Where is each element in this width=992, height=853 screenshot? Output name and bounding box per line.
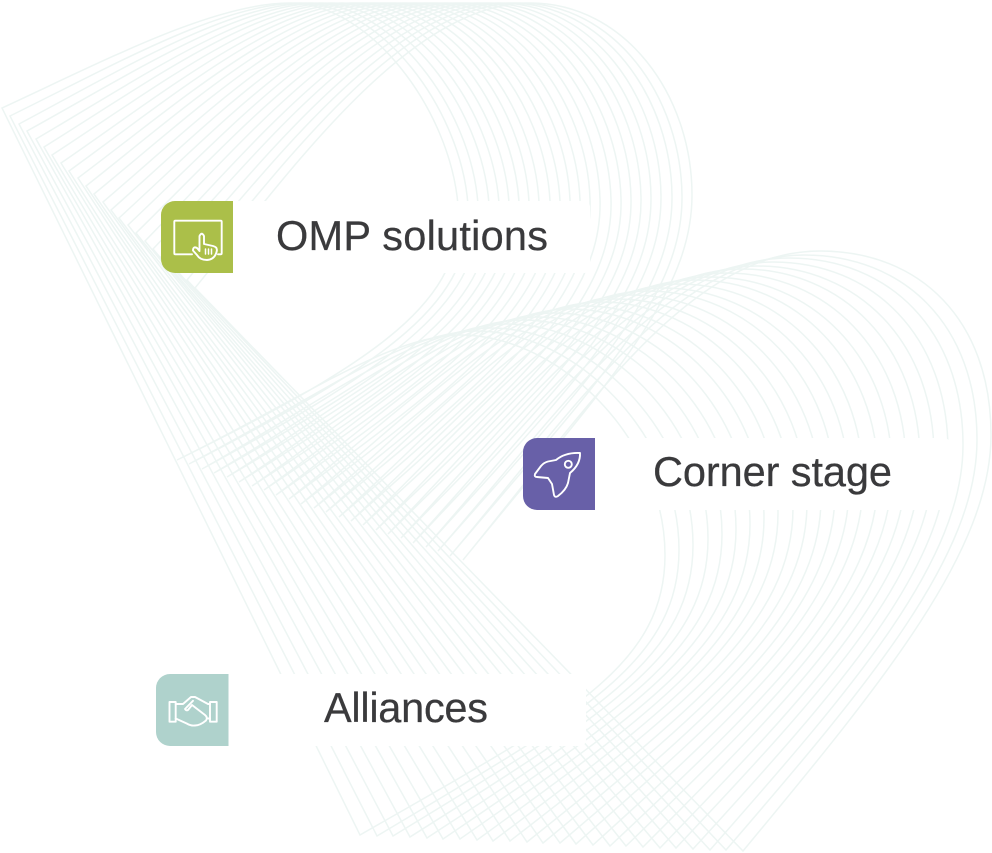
label background: Alliances	[228, 674, 586, 746]
panel: Corner stage	[523, 438, 950, 510]
panel: OMP solutions	[161, 201, 590, 273]
icon: handshake	[170, 697, 217, 726]
panel: Alliances	[156, 674, 586, 746]
label background: OMP solutions	[233, 201, 590, 273]
label background: Corner stage	[595, 438, 950, 510]
label: Corner stage: Corner stage	[653, 448, 892, 495]
label: Alliances: Alliances	[324, 684, 488, 731]
icon tile: teal	[156, 674, 228, 746]
icon tile: purple	[523, 438, 595, 510]
icon tile: green	[161, 201, 233, 273]
icon: rocket	[535, 453, 580, 497]
icon: hand tapping a touch screen	[174, 221, 222, 260]
label: OMP solutions: OMP solutions	[276, 212, 548, 259]
